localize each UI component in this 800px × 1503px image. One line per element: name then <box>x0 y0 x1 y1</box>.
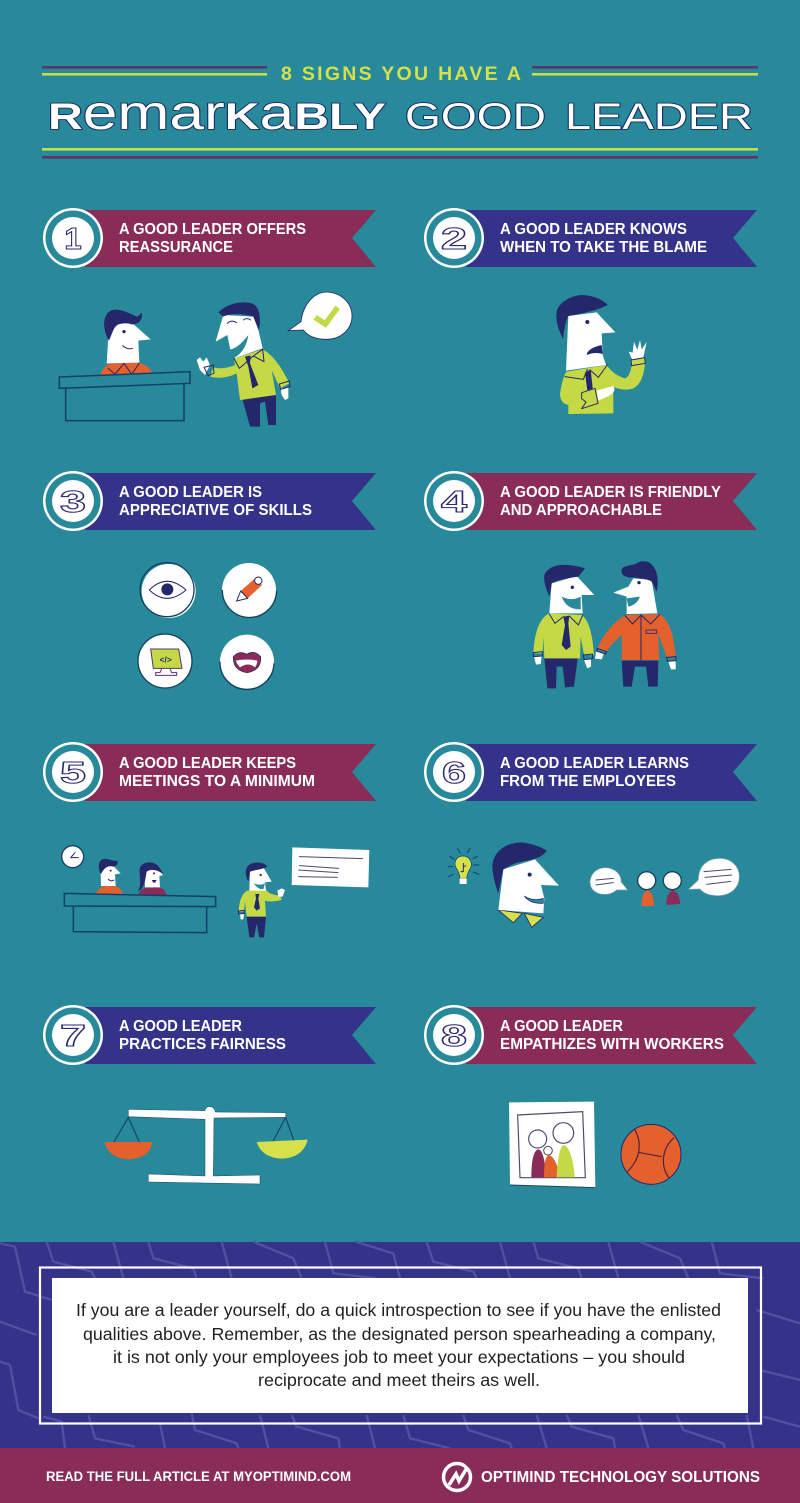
illustration 5: meeting scene <box>62 846 369 937</box>
illustration 3: skill icons <box>138 563 277 690</box>
illustration 4: friendly colleagues <box>533 561 676 688</box>
banner 6: A GOOD LEADER LEARNS <box>500 755 689 772</box>
logo icon <box>444 1462 473 1490</box>
banner 1: 1 <box>64 221 82 256</box>
title: remarkably good leader: GOOD <box>405 96 546 137</box>
illustration 1: reassurance scene <box>59 292 352 427</box>
banner 2: WHEN TO TAKE THE BLAME <box>500 239 707 256</box>
banner 1: REASSURANCE <box>119 239 233 256</box>
wall clock <box>62 846 84 868</box>
illustration 6: learning from employees <box>448 843 739 927</box>
banner 6: FROM THE EMPLOYEES <box>500 773 676 790</box>
banner 5 <box>43 742 376 802</box>
text panel: reciprocate and meet theirs as well. <box>258 1370 540 1390</box>
banner 1: A GOOD LEADER OFFERS <box>119 221 306 238</box>
employees <box>638 872 681 906</box>
banner 3: APPRECIATIVE OF SKILLS <box>119 502 312 519</box>
banner 7: A GOOD LEADER <box>119 1018 242 1035</box>
banner 2: A GOOD LEADER KNOWS <box>500 221 687 238</box>
banner 3: A GOOD LEADER IS <box>119 484 262 501</box>
desk <box>59 372 190 421</box>
desk <box>64 893 216 933</box>
closing band <box>0 1242 800 1448</box>
banner 6 <box>424 742 757 802</box>
speech bubble with check <box>288 292 352 339</box>
icon: pencil <box>222 563 277 617</box>
text panel: qualities above. Remember, as the designated person spearheading a company, <box>83 1324 716 1344</box>
seated man <box>96 859 123 894</box>
standing leader <box>197 302 290 427</box>
icon: light bulb <box>448 848 479 884</box>
seated man <box>100 310 152 375</box>
banner 4 <box>424 471 757 531</box>
family photo <box>509 1102 595 1188</box>
employee bubble left <box>590 868 628 894</box>
presenter <box>238 863 285 937</box>
header block <box>42 63 758 159</box>
illustration 2: taking the blame <box>556 295 647 414</box>
icon: eye <box>140 563 196 618</box>
banner 2: 2 <box>441 221 467 256</box>
footer bar <box>0 1448 800 1503</box>
basketball <box>621 1124 681 1184</box>
title: remarkably good leader: LEADER <box>565 96 753 137</box>
banner 5: MEETINGS TO A MINIMUM <box>119 773 315 790</box>
banner 4: AND APPROACHABLE <box>500 502 662 519</box>
text frame <box>40 1268 761 1424</box>
leader in green shirt <box>533 565 594 688</box>
text panel: If you are a leader yourself, do a quick introspection to see if you have the enlisted <box>76 1300 721 1320</box>
banner 4: A GOOD LEADER IS FRIENDLY <box>500 484 722 501</box>
banner 7: PRACTICES FAIRNESS <box>119 1036 286 1053</box>
text panel: it is not only your employees job to meet your expectations – you should <box>113 1347 685 1367</box>
banner 8: A GOOD LEADER <box>500 1018 623 1035</box>
icon: smiling mouth <box>220 635 274 690</box>
title: remarkably good leader <box>48 87 753 140</box>
illustration 7: balance scale <box>105 1107 308 1184</box>
zigzag pattern <box>0 1242 800 1448</box>
banner 8 <box>424 1005 757 1065</box>
banner 1 <box>43 208 376 268</box>
banner 4: 4 <box>441 484 468 519</box>
banner 3: 3 <box>60 484 86 519</box>
banner 5: A GOOD LEADER KEEPS <box>119 755 296 772</box>
banner 5: 5 <box>60 755 86 790</box>
banner 8: 8 <box>441 1018 467 1053</box>
banner 2 <box>424 208 757 268</box>
footer link text: READ THE FULL ARTICLE AT MYOPTIMIND.COM <box>46 1469 351 1484</box>
banner 3 <box>43 471 376 531</box>
icon: code monitor: </> <box>160 654 172 664</box>
banner 7: 7 <box>60 1018 86 1053</box>
banner 8: EMPATHIZES WITH WORKERS <box>500 1036 724 1053</box>
title: remarkably good leader: Remar KaBLY <box>48 87 386 140</box>
seated woman <box>138 862 167 895</box>
banner 7 <box>43 1005 376 1065</box>
employee bubble right <box>688 858 739 896</box>
leader head <box>492 843 559 927</box>
company name: OPTIMIND TECHNOLOGY SOLUTIONS <box>481 1469 760 1486</box>
text panel <box>52 1278 748 1413</box>
banner 6: 6 <box>442 755 466 790</box>
colleague in orange shirt <box>595 561 676 687</box>
illustration 8: family photo and ball <box>509 1102 681 1188</box>
presentation screen <box>292 847 369 887</box>
heading: 8 signs: 8 SIGNS YOU HAVE A <box>281 63 521 85</box>
